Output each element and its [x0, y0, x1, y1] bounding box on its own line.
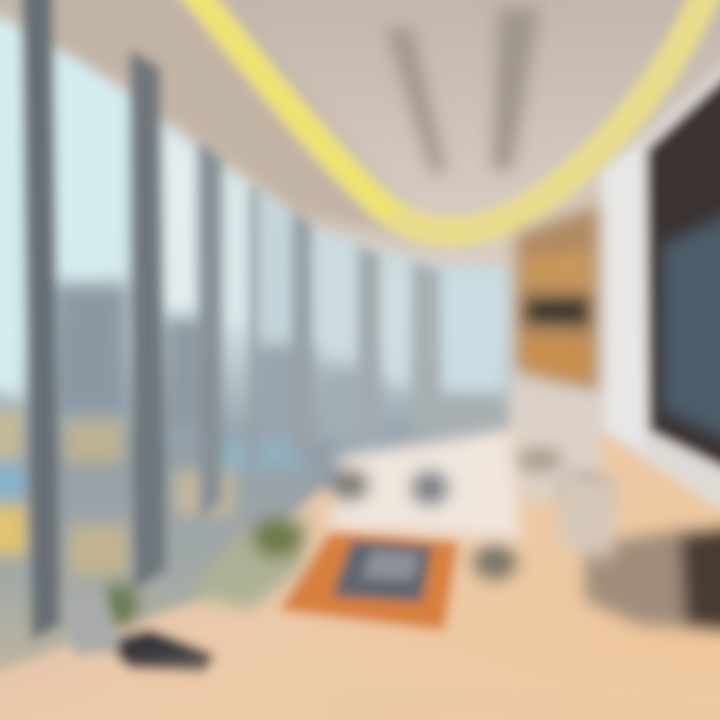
- floor highlight: [0, 650, 720, 720]
- sofa: [555, 470, 720, 632]
- ceiling: [0, 0, 720, 310]
- wooden shelf: [516, 205, 598, 392]
- city: [0, 285, 505, 575]
- plants: [102, 515, 310, 627]
- centre white furniture: [330, 395, 609, 580]
- dark chair at the window: [62, 590, 214, 672]
- window panes bright sky: [0, 10, 505, 400]
- ceiling vents: [386, 8, 540, 175]
- white pillar: [604, 145, 644, 450]
- window wall: [0, 0, 510, 680]
- dark window: [648, 55, 720, 480]
- floor: [0, 430, 720, 720]
- columns: [22, 0, 440, 640]
- orange rug with table: [280, 532, 458, 630]
- right wall: [600, 40, 720, 530]
- yellow ceiling light: [185, 0, 712, 231]
